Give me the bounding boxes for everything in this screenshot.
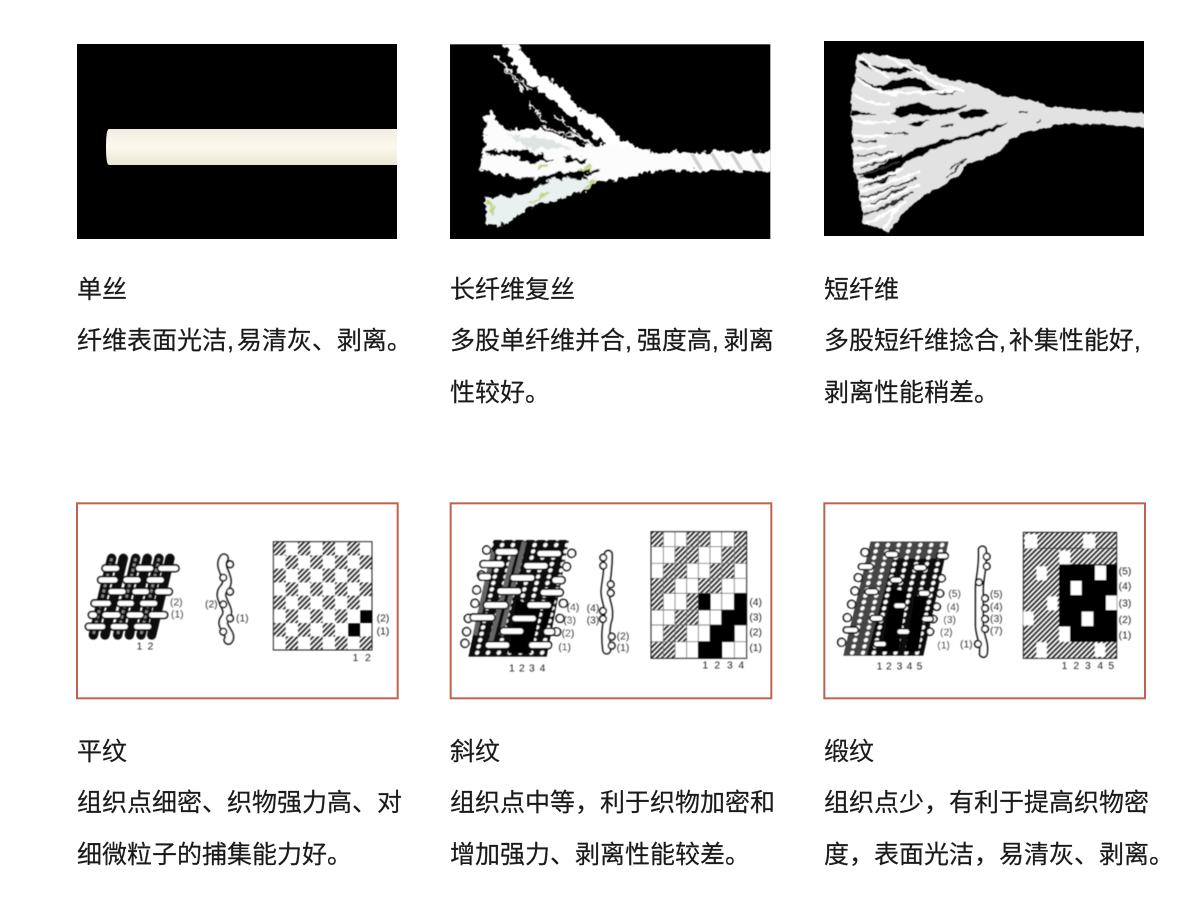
text: twill weave description: 增加强力、剥离性能较差。 xyxy=(450,840,750,868)
plain weave grid: 1 xyxy=(353,653,359,664)
twill grid: (1) xyxy=(749,643,762,654)
satin grid: 5 xyxy=(1108,661,1114,672)
satin weave cloth: 4 xyxy=(907,662,913,673)
heading: satin weave: 缎纹 xyxy=(824,738,874,766)
heading: multifilament: 长纤维复丝 xyxy=(450,276,575,304)
satin yarn section: (4) xyxy=(990,602,1003,613)
plain weave grid: (2) xyxy=(377,614,389,625)
text: staple fibre description: 剥离性能稍差。 xyxy=(824,378,999,406)
plain weave cloth: (1) xyxy=(171,609,184,620)
twill yarn section: (4) xyxy=(587,604,599,615)
heading: twill weave: 斜纹 xyxy=(450,738,500,766)
satin grid: 4 xyxy=(1097,661,1103,672)
satin grid: 3 xyxy=(1085,661,1091,672)
satin yarn section xyxy=(960,550,1003,653)
plain weave grid: (1) xyxy=(377,626,389,637)
frayed fibre body xyxy=(850,53,1148,232)
plain weave yarn section: (2) xyxy=(205,599,218,610)
twill yarn section: (2) xyxy=(617,632,629,643)
heading: monofilament: 单丝 xyxy=(77,276,127,304)
satin yarn section: (3) xyxy=(990,614,1003,625)
satin grid: 1 xyxy=(1062,661,1068,672)
twill weave cloth: (2) xyxy=(562,628,574,639)
satin weave cloth: (3) xyxy=(943,615,956,626)
satin yarn section: (1) xyxy=(960,640,973,651)
twill weave cloth: 4 xyxy=(540,664,546,675)
text: multifilament description xyxy=(450,327,774,406)
photo: multifilament xyxy=(450,44,770,239)
middle fibre fan xyxy=(480,110,775,182)
white monofilament tube xyxy=(106,129,397,165)
satin grid: (3) xyxy=(1119,598,1131,609)
satin yarn section: (5) xyxy=(990,589,1003,600)
satin weave cloth: 2 xyxy=(886,662,892,673)
black gaps between strands xyxy=(852,60,1008,183)
satin weave cloth: (2) xyxy=(940,628,953,639)
plain weave cloth: 1 xyxy=(137,642,143,653)
twill yarn section: (1) xyxy=(617,643,629,654)
text: satin weave description xyxy=(824,789,1174,868)
satin yarn section: (7) xyxy=(990,626,1003,637)
panel: twill weave diagram xyxy=(450,502,772,700)
plain weave cloth: (2) xyxy=(170,598,183,609)
text: staple fibre description: 多股短纤维捻合, 补集性能好, xyxy=(824,327,1141,355)
twill weave cloth: (4) xyxy=(567,602,579,613)
text: multifilament description: 性较好。 xyxy=(450,378,550,406)
satin grid: 2 xyxy=(1073,661,1079,672)
photo: monofilament xyxy=(77,44,397,239)
satin weave cloth: 1 xyxy=(877,662,883,673)
text: satin weave description: 组织点少，有利于提高织物密 xyxy=(824,789,1149,817)
satin weave cloth xyxy=(838,542,961,673)
twill grid: (3) xyxy=(749,613,762,624)
satin grid xyxy=(1023,532,1131,672)
upper fibre strand xyxy=(502,42,648,158)
black gaps in fan xyxy=(485,150,600,194)
satin grid: (1) xyxy=(1119,630,1131,641)
satin weave cloth: (4) xyxy=(947,602,959,613)
twill yarn section: (3) xyxy=(587,616,599,627)
plain weave cloth xyxy=(85,558,184,653)
text: twill weave description: 组织点中等，利于织物加密和 xyxy=(450,789,775,817)
satin weave cloth: (5) xyxy=(948,589,961,600)
rope twist marks xyxy=(692,153,762,170)
white fine fibre strokes xyxy=(853,55,963,230)
satin weave cloth: 5 xyxy=(917,662,923,673)
twill weave cloth: 1 xyxy=(509,664,515,675)
twill grid: (2) xyxy=(749,628,762,639)
twill yarn section xyxy=(587,554,629,654)
heading: staple fibre: 短纤维 xyxy=(824,276,899,304)
text: satin weave description: 度，表面光洁，易清灰、剥离。 xyxy=(824,840,1174,868)
twill grid: 3 xyxy=(727,660,733,671)
plain weave cloth: 2 xyxy=(148,642,154,653)
twill weave cloth: 2 xyxy=(519,664,525,675)
plain weave grid: 2 xyxy=(365,653,371,664)
text: monofilament description: 纤维表面光洁, 易清灰、剥离。 xyxy=(77,327,412,355)
panel: plain weave diagram xyxy=(76,502,399,700)
text: twill weave description xyxy=(450,789,775,868)
text: staple fibre description xyxy=(824,327,1141,406)
twill grid xyxy=(651,532,762,671)
twill grid: 4 xyxy=(738,660,744,671)
satin grid: (4) xyxy=(1119,582,1131,593)
twill grid: 2 xyxy=(714,660,720,671)
text: plain weave description xyxy=(77,789,402,868)
plain weave yarn section xyxy=(205,558,249,640)
twill weave cloth xyxy=(461,540,579,675)
plain weave grid xyxy=(273,542,389,664)
lower fibre strand xyxy=(485,178,598,228)
twill grid: 1 xyxy=(702,660,708,671)
panel: satin weave diagram xyxy=(823,502,1146,700)
twill weave cloth: (3) xyxy=(563,616,576,627)
text: plain weave description: 组织点细密、织物强力高、对 xyxy=(77,789,402,817)
satin grid: (5) xyxy=(1119,566,1131,577)
heading: plain weave: 平纹 xyxy=(77,738,127,766)
satin grid: (2) xyxy=(1119,615,1131,626)
satin weave cloth: 3 xyxy=(897,662,903,673)
dark fine fibre lines xyxy=(857,112,1040,215)
twill weave cloth: (1) xyxy=(558,642,571,653)
plain weave yarn section: (1) xyxy=(236,614,249,625)
text: multifilament description: 多股单纤维并合, 强度高, 剥离 xyxy=(450,327,774,355)
text: plain weave description: 细微粒子的捕集能力好。 xyxy=(77,840,352,868)
twill weave cloth: 3 xyxy=(529,664,535,675)
photo: staple fibre xyxy=(824,41,1144,236)
satin weave cloth: (1) xyxy=(937,640,950,651)
twill grid: (4) xyxy=(749,598,762,609)
